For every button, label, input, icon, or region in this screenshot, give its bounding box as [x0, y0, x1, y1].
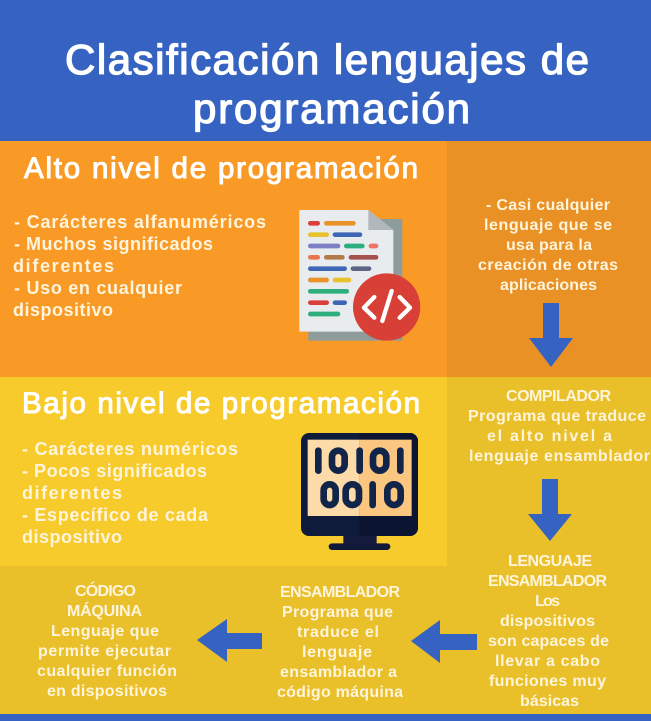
text block: lenguaje ensamblador: son capaces de	[488, 633, 609, 650]
text block: codigo maquina: en dispositivos	[47, 683, 167, 700]
text block: codigo maquina	[37, 581, 177, 700]
text block: bajo nivel features: - Pocos significados	[22, 461, 207, 481]
text block: bajo nivel features	[22, 439, 238, 547]
text block: casi cualquier lenguaje	[478, 197, 618, 294]
arrow: down to compilador	[529, 303, 573, 367]
text block: compilador	[468, 388, 650, 465]
text block: lenguaje ensamblador: Los	[535, 593, 560, 610]
text block: ensamblador: ENSAMBLADOR	[280, 584, 400, 601]
text block: codigo maquina: permite ejecutar	[38, 643, 171, 660]
text block: lenguaje ensamblador: funciones muy	[489, 673, 606, 690]
text block: lenguaje ensamblador: LENGUAJE	[508, 553, 592, 570]
text block: bajo nivel features: dispositivo	[22, 527, 122, 547]
text block: casi cualquier lenguaje: lenguaje que se	[484, 217, 612, 234]
text block: casi cualquier lenguaje: creación de otras	[478, 257, 618, 274]
text block: bajo nivel features: - Específico de cada	[22, 505, 209, 525]
panel: low level yellow	[0, 377, 447, 566]
text block: compilador: el alto nivel a	[487, 428, 612, 445]
text block: lenguaje ensamblador: ENSAMBLADOR	[488, 573, 607, 590]
panel: process bottom row	[0, 566, 651, 714]
text block: alto nivel features: - Uso en cualquier	[14, 278, 182, 298]
text block: alto nivel features: - Muchos significados	[14, 234, 213, 254]
text block: compilador: COMPILADOR	[506, 388, 611, 405]
text block: bajo nivel features: - Carácteres numéricos	[22, 439, 238, 459]
title	[65, 36, 589, 132]
text block: ensamblador: ensamblador a	[280, 664, 397, 681]
text block: alto nivel features	[13, 212, 266, 320]
title: programación	[193, 85, 470, 132]
text block: alto nivel features: - Carácteres alfanuméricos	[14, 212, 266, 232]
text block: lenguaje ensamblador	[488, 553, 609, 710]
text block: bajo nivel features: diferentes	[22, 483, 122, 503]
text block: lenguaje ensamblador: básicas	[520, 693, 579, 710]
text block: casi cualquier lenguaje: - Casi cualquier	[486, 197, 610, 214]
icon: code document	[299, 210, 420, 341]
arrow: down to lenguaje ensamblador	[528, 479, 572, 541]
text block: codigo maquina: Lenguaje que	[51, 623, 159, 640]
panel: process side column	[447, 377, 651, 566]
icon: binary monitor	[301, 433, 418, 550]
text block: codigo maquina: MÁQUINA	[67, 601, 142, 620]
text block: ensamblador: lenguaje	[302, 644, 372, 661]
text block: lenguaje ensamblador: dispositivos	[500, 613, 595, 630]
footer blue strip	[0, 714, 651, 721]
text block: lenguaje ensamblador: llevar a cabo	[495, 653, 600, 670]
heading: alto nivel: Alto nivel de programación	[24, 152, 418, 185]
text block: alto nivel features: diferentes	[13, 256, 114, 276]
arrow: left to codigo maquina	[197, 619, 262, 662]
panel: high level orange	[0, 141, 447, 377]
title: Clasificación lenguajes de	[65, 36, 589, 83]
text block: ensamblador: traduce el	[297, 624, 379, 641]
background: top blue band	[0, 0, 651, 141]
text block: codigo maquina: cualquier función	[37, 663, 177, 680]
text block: ensamblador: Programa que	[282, 604, 393, 621]
text block: casi cualquier lenguaje: usa para la	[506, 237, 592, 254]
arrow: left to ensamblador	[411, 620, 477, 663]
text block: alto nivel features: dispositivo	[13, 300, 113, 320]
text block: ensamblador: código máquina	[277, 684, 403, 701]
text block: compilador: Programa que traduce	[468, 408, 646, 425]
heading: bajo nivel: Bajo nivel de programación	[22, 387, 420, 420]
text block: codigo maquina: CÓDIGO	[75, 581, 136, 600]
text block: compilador: lenguaje ensamblador	[469, 448, 650, 465]
text block: ensamblador	[277, 584, 403, 701]
text block: casi cualquier lenguaje: aplicaciones	[500, 277, 597, 294]
panel: high level side column	[447, 141, 651, 377]
